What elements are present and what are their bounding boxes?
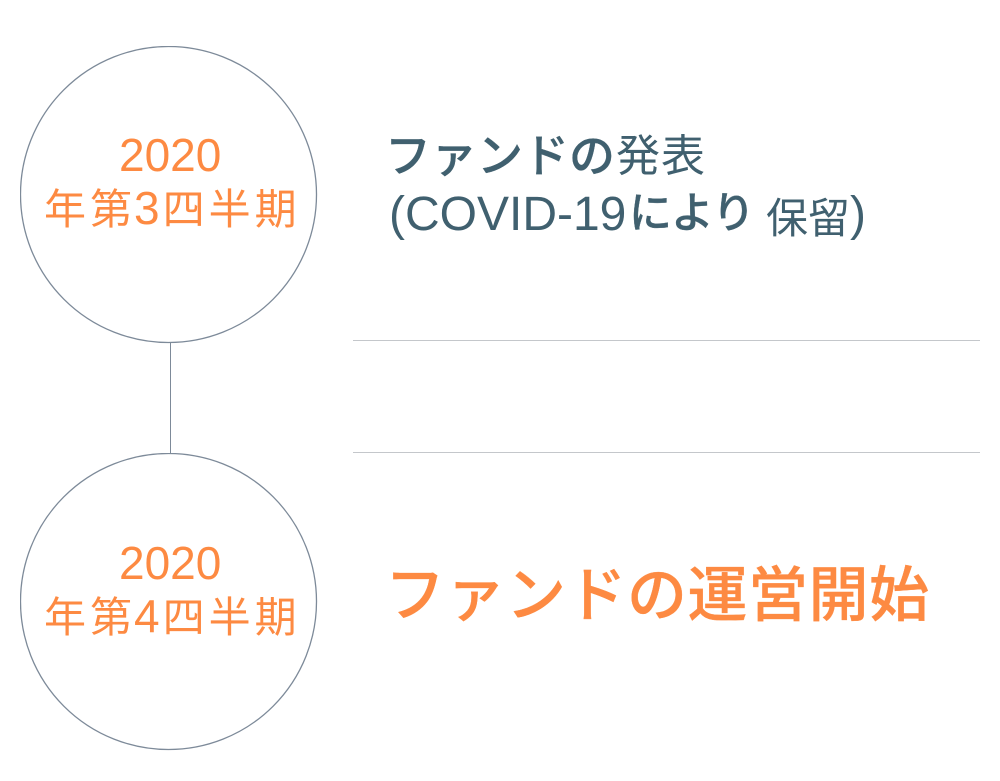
- heading: fund announcement: ファンドの: [385, 130, 615, 182]
- circle: 2020 Q3: [20, 46, 318, 344]
- heading: fund announcement: ): [850, 188, 866, 241]
- label: 2020 Q3: [44, 129, 301, 234]
- heading: fund announcement: (COVID-19: [389, 188, 626, 241]
- connector line between circles: [170, 342, 171, 454]
- heading: fund announcement: 発表: [616, 132, 706, 181]
- label: 2020 Q4: 2020: [119, 537, 221, 589]
- circle: 2020 Q4: [20, 453, 318, 750]
- label: 2020 Q4: 年第4四半期: [44, 590, 301, 642]
- heading: fund announcement: 保留: [766, 195, 850, 242]
- divider: [353, 452, 980, 453]
- label: 2020 Q3: 2020: [119, 129, 221, 181]
- divider: [353, 340, 980, 341]
- heading: fund operations start: ファンドの運営開始: [385, 562, 930, 629]
- heading: fund announcement: [385, 130, 866, 242]
- label: 2020 Q4: [44, 537, 301, 642]
- label: 2020 Q3: 年第3四半期: [44, 182, 301, 234]
- heading: fund announcement: により: [629, 190, 754, 238]
